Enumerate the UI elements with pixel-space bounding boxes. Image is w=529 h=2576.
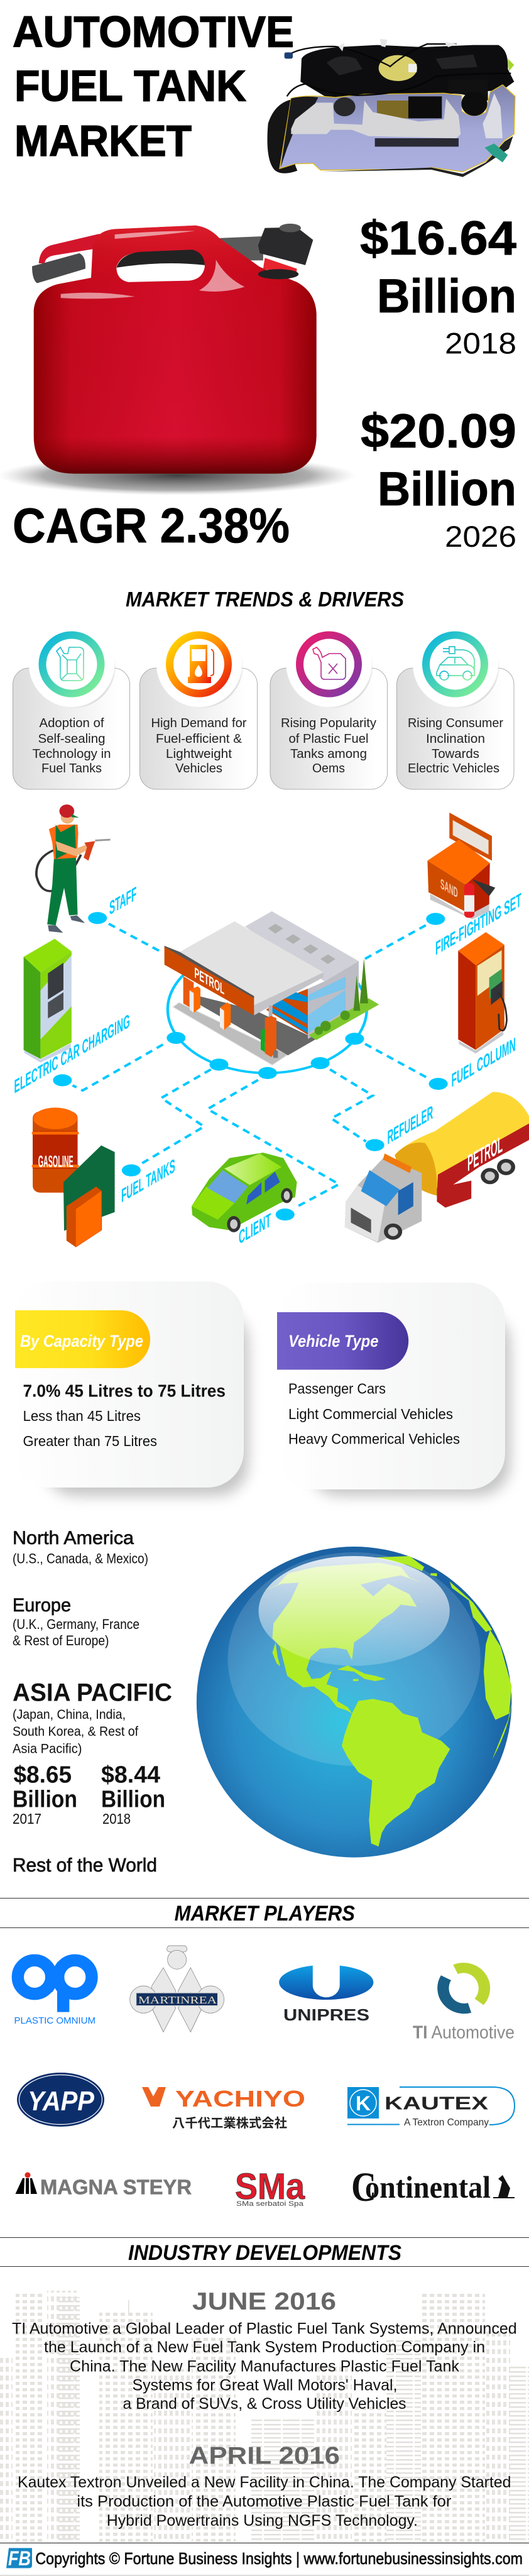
panel: driver 2 <box>139 622 258 789</box>
asia pacific 2018 value: Billion <box>101 1787 165 1813</box>
text: Tanks among <box>290 747 367 761</box>
logo: ti automotive <box>413 1968 515 2043</box>
logo: continental: ontinental <box>365 2169 491 2205</box>
text: Fuel Tanks <box>41 761 102 776</box>
connector dots <box>53 912 448 1220</box>
development: april 2016 <box>18 2443 511 2529</box>
logo: martinrea <box>130 1946 224 2032</box>
development: june 2016: the Launch of a New Fuel Tank System Production Company in <box>44 2338 485 2356</box>
logo: ti automotive: TI Automotive <box>413 2023 515 2043</box>
infographic: petrol station diagram: GASOLINE <box>38 1152 74 1171</box>
text: High Demand for <box>151 716 247 730</box>
title <box>13 8 294 165</box>
text: of Plastic Fuel <box>289 732 368 746</box>
red neck <box>263 258 297 276</box>
text: Lightweight <box>166 747 232 761</box>
asia pacific 2017 value: Billion <box>13 1787 77 1813</box>
development: april 2016: its Production of the Automotive Plastic Fuel Tank for <box>77 2492 451 2510</box>
development: june 2016 <box>12 2288 517 2413</box>
can handle arm <box>39 234 99 263</box>
text: Adoption of <box>39 716 104 730</box>
diagram labels: STAFF <box>109 883 136 919</box>
text: Electric Vehicles <box>408 761 499 776</box>
ring <box>426 635 484 694</box>
pill label <box>15 1310 150 1368</box>
pill label: Vehicle Type <box>288 1332 378 1351</box>
title: FUEL TANK <box>14 62 246 111</box>
logo: kautex: KAUTEX <box>384 2094 489 2114</box>
logo: yachiyo <box>142 2086 305 2130</box>
logo: plastic omnium: PLASTIC OMNIUM <box>14 2015 95 2026</box>
black cap <box>258 227 313 265</box>
market size 2026: 2026 <box>445 520 516 553</box>
diagram labels <box>14 883 521 1249</box>
icon: fuel column <box>458 932 507 1053</box>
text: Vehicles <box>175 761 222 776</box>
list: Passenger Cars <box>288 1381 386 1397</box>
icon: fuel pump <box>188 645 214 683</box>
market size 2018: Billion <box>377 270 516 323</box>
asia pacific 2017 value <box>13 1762 77 1827</box>
development: june 2016: China. The New Facility Manufactures Plastic Fuel Tank <box>70 2358 459 2376</box>
image: automotive fuel tank cutaway <box>268 39 515 177</box>
text <box>408 716 503 776</box>
text: Self-sealing <box>38 732 106 746</box>
diagram labels: FUEL TANKS <box>121 1155 175 1207</box>
list: Light Commercial Vehicles <box>288 1406 453 1422</box>
icon: fuel tanks <box>31 1107 115 1247</box>
asia pacific <box>13 1679 172 1757</box>
icon: plastic can <box>313 647 346 679</box>
icon: fortune business insights logo: FB <box>8 2547 31 2570</box>
handle opening <box>116 251 205 282</box>
logo: kautex <box>347 2087 515 2128</box>
text: Rising Popularity <box>281 716 377 730</box>
development: april 2016: APRIL 2016 <box>189 2443 340 2470</box>
icon: fire fighting set <box>427 813 495 919</box>
europe: & Rest of Europe) <box>13 1633 109 1648</box>
north america <box>13 1528 148 1566</box>
text <box>151 716 247 776</box>
globe <box>197 1547 511 1858</box>
market size 2018: 2018 <box>445 327 516 359</box>
list: Less than 45 Litres <box>23 1408 141 1424</box>
logo: sma: SMa <box>235 2166 305 2207</box>
logo: yapp: YAPP <box>28 2086 95 2117</box>
station building: PETROL <box>194 964 224 998</box>
text: Technology in <box>33 747 111 761</box>
logo: yachiyo: 八千代工業株式会社 <box>172 2116 287 2130</box>
heading: market trends and drivers: MARKET TRENDS & DRIVERS <box>126 588 404 611</box>
panel: driver 3 <box>270 622 387 789</box>
asia pacific: (Japan, China, India, <box>13 1707 126 1722</box>
footer <box>0 2543 529 2575</box>
title: MARKET <box>14 116 192 165</box>
panel: driver 1 <box>13 622 129 789</box>
ring <box>43 635 101 694</box>
asia pacific 2018 value: 2018 <box>102 1811 131 1827</box>
market size 2018 <box>360 212 516 359</box>
asia pacific 2017 value: 2017 <box>13 1811 41 1827</box>
icon: client car <box>192 1153 297 1232</box>
pill label <box>277 1312 408 1370</box>
development: june 2016: Systems for Great Wall Motors' Haval, <box>132 2377 397 2394</box>
europe: Europe <box>13 1595 71 1616</box>
can spout tube <box>32 253 85 283</box>
list: Greater than 75 Litres <box>23 1433 157 1449</box>
text: Fuel-efficient & <box>156 732 242 746</box>
logo: plastic omnium <box>14 1960 95 2026</box>
logo: magna steyr: MAGNA STEYR <box>40 2175 192 2198</box>
logo: yapp <box>18 2073 104 2127</box>
asia pacific: South Korea, & Rest of <box>13 1724 138 1739</box>
logo: kautex: K <box>356 2092 371 2115</box>
figure: staff attendant <box>36 804 111 933</box>
pill label: By Capacity Type <box>20 1332 143 1351</box>
development: june 2016: TI Automotive a Global Leader of Plastic Fuel Tank Systems, Announced <box>12 2320 517 2337</box>
text: Oems <box>312 761 345 776</box>
text: Towards <box>432 747 479 761</box>
development: june 2016: JUNE 2016 <box>192 2288 336 2315</box>
north america: North America <box>13 1528 134 1548</box>
title: AUTOMOTIVE <box>13 8 294 57</box>
rest of the world: Rest of the World <box>13 1854 157 1876</box>
CAGR: CAGR 2.38% <box>13 498 290 553</box>
ring <box>300 635 358 694</box>
logo: unipres: UNIPRES <box>283 2005 369 2024</box>
highlights <box>61 231 244 299</box>
logo: kautex: A Textron Company <box>404 2117 489 2128</box>
list: Heavy Commerical Vehicles <box>288 1431 460 1447</box>
text <box>281 716 377 776</box>
icon: electric charger <box>24 939 72 1063</box>
rear pipe <box>219 236 263 260</box>
wheels <box>440 671 472 680</box>
market size 2026 <box>361 405 516 553</box>
image: red jerry can <box>0 224 356 495</box>
asia pacific: Asia Pacific) <box>13 1741 82 1757</box>
region list <box>13 1528 172 1876</box>
logo: yachiyo: YACHIYO <box>175 2086 305 2112</box>
text <box>33 716 111 776</box>
north america: (U.S., Canada, & Mexico) <box>13 1551 148 1566</box>
skyline background <box>0 2291 529 2543</box>
ring <box>170 635 228 694</box>
logo: unipres <box>279 1963 373 2024</box>
text: Rising Consumer <box>408 716 503 730</box>
development: april 2016: Hybrid Powertrains Using NGFS Technology. <box>107 2512 418 2529</box>
asia pacific 2017 value: $8.65 <box>14 1762 72 1788</box>
icon: jerry can <box>57 647 84 681</box>
can body <box>34 226 317 474</box>
diagram labels: ELECTRIC CAR CHARGING <box>14 1010 130 1098</box>
body shading <box>34 226 317 474</box>
ribbed grip <box>116 249 205 268</box>
infographic: petrol station diagram <box>14 804 529 1249</box>
diagram labels: CLIENT <box>239 1209 271 1249</box>
heading: market players: MARKET PLAYERS <box>175 1902 355 1926</box>
market size 2026: Billion <box>378 463 516 516</box>
connector lines and ring <box>72 924 428 1208</box>
europe: (U.K., Germany, France <box>13 1616 139 1632</box>
icon: refueler truck <box>345 1092 529 1243</box>
station building <box>165 911 379 1065</box>
asia pacific 2018 value <box>101 1762 165 1827</box>
asia pacific 2018 value: $8.44 <box>101 1762 160 1788</box>
icon: electric car <box>437 647 474 676</box>
logo: continental: C <box>351 2164 376 2210</box>
panel: vehicle type <box>277 1283 510 1496</box>
development: april 2016: Kautex Textron Unveiled a New Facility in China. The Company Started <box>18 2474 511 2491</box>
logo: sma: SMa serbatoi Spa <box>236 2200 304 2208</box>
europe <box>13 1595 139 1648</box>
logo: martinrea: MARTINREA <box>138 1994 217 2006</box>
panel: driver 4 <box>397 622 514 789</box>
logo: continental <box>351 2164 515 2210</box>
development: june 2016: a Brand of SUVs, & Cross Utility Vehicles <box>123 2395 406 2413</box>
panel: by capacity type <box>13 1281 248 1496</box>
list <box>23 1381 226 1449</box>
market size 2026: $20.09 <box>361 405 516 458</box>
heading: industry developments: INDUSTRY DEVELOPMENTS <box>128 2241 401 2265</box>
diagram labels: REFUELER <box>387 1102 433 1149</box>
text: Inclination <box>426 732 485 746</box>
text: sand: SAND <box>440 875 458 901</box>
asia pacific: ASIA PACIFIC <box>13 1679 172 1706</box>
list: 7.0% 45 Litres to 75 Litres <box>23 1381 226 1401</box>
market size 2018: $16.64 <box>360 212 516 265</box>
list <box>288 1381 460 1447</box>
